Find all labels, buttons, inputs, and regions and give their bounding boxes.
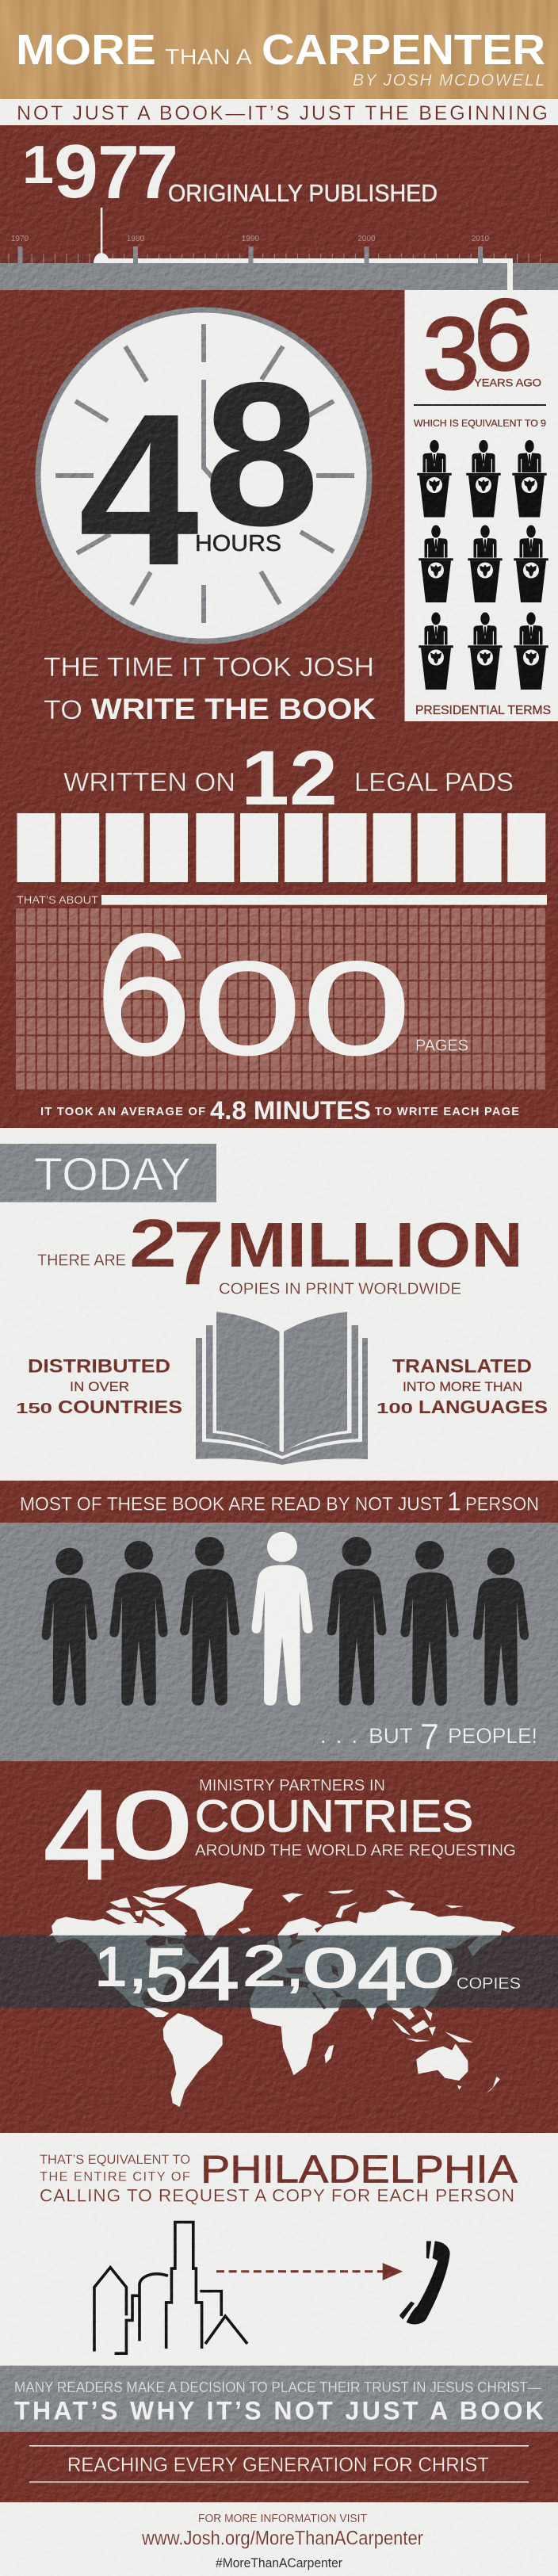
distributed callout: DISTRIBUTED — [28, 1356, 170, 1378]
arrow: city to phone — [216, 2263, 403, 2280]
translated callout: LANGUAGES — [418, 1397, 548, 1417]
icon: seven person figures — [42, 1532, 529, 1706]
translated callout: INTO MORE THAN — [403, 1380, 522, 1394]
caption: time it took josh: TO — [44, 695, 82, 725]
hours label: HOURS — [195, 531, 281, 556]
27 million copies headline: COPIES IN PRINT WORLDWIDE — [219, 1281, 461, 1298]
ministry partners text: AROUND THE WORLD ARE REQUESTING — [195, 1841, 516, 1859]
many readers text: MANY READERS MAKE A DECISION TO PLACE THEIR TRUST IN JESUS CHRIST— — [14, 2379, 541, 2395]
caption: time it took josh — [44, 652, 376, 725]
panel: footer — [0, 2502, 558, 2576]
copies requested number: , — [286, 1936, 304, 1997]
heading: written on 12 legal pads: 12 — [241, 735, 338, 821]
panel: reaching every generation banner — [0, 2432, 558, 2502]
world map — [46, 1882, 515, 2107]
translated callout — [376, 1356, 548, 1417]
byline: BY JOSH MCDOWELL — [353, 71, 545, 90]
big number 600: 0 — [302, 934, 411, 1083]
timeline: 2010 — [472, 235, 490, 243]
copies requested number: 4 — [357, 1932, 407, 2016]
presidential terms label: PRESIDENTIAL TERMS — [415, 704, 551, 717]
27 million copies headline: THERE ARE — [37, 1252, 126, 1270]
ministry partners text — [195, 1777, 516, 1859]
hashtag: #MoreThanACarpenter — [216, 2555, 342, 2570]
but 7 people text: 7 — [420, 1716, 439, 1757]
timeline: 1970 — [11, 235, 29, 243]
minutes per page line: 4.8 MINUTES — [210, 1096, 371, 1125]
philadelphia heading text: CALLING TO REQUEST A COPY FOR EACH PERSON — [40, 2186, 514, 2205]
27 million copies headline — [37, 1203, 523, 1304]
clock tick marks and hands — [55, 324, 354, 623]
number 36: 6 — [474, 278, 533, 391]
panel: seven people — [0, 1523, 558, 1761]
philadelphia heading text — [40, 2149, 518, 2205]
page grid — [16, 908, 547, 1090]
27 million copies headline: MILLION — [227, 1210, 523, 1280]
translated callout: 100 — [376, 1401, 413, 1416]
banner text: 1 — [447, 1487, 461, 1516]
heading: written on 12 legal pads: LEGAL PADS — [354, 767, 514, 797]
timeline — [0, 208, 558, 290]
number 36: 3 — [422, 297, 480, 411]
icon: nine presidential podiums — [417, 440, 548, 690]
minutes per page line: IT TOOK AN AVERAGE OF — [40, 1106, 205, 1118]
big number 40: 4 — [44, 1764, 117, 1905]
year 1977: 7 — [136, 130, 178, 215]
more information label: FOR MORE INFORMATION VISIT — [198, 2512, 367, 2525]
but 7 people text: PEOPLE! — [448, 1724, 537, 1748]
27 million copies headline: 7 — [173, 1203, 224, 1304]
copies requested number: 4 — [187, 1932, 239, 2016]
year 1977: 1 — [22, 135, 54, 195]
panel: subtitle strip — [0, 99, 558, 125]
website url: www.Josh.org/MoreThanACarpenter — [141, 2528, 423, 2550]
translated callout: TRANSLATED — [392, 1356, 532, 1378]
big number 600: 0 — [193, 934, 302, 1083]
subtitle text: NOT JUST A BOOK—IT’S JUST THE BEGINNING — [17, 102, 548, 124]
27 million copies headline: 2 — [129, 1206, 177, 1282]
twelve legal pads — [17, 813, 545, 882]
timeline: 2000 — [357, 235, 376, 243]
icon: telephone handset — [399, 2241, 450, 2324]
copies requested number: 0 — [303, 1937, 358, 1999]
philadelphia heading text: THAT’S EQUIVALENT TO — [40, 2153, 190, 2167]
banner text: REACHING EVERY GENERATION FOR CHRIST — [67, 2454, 489, 2476]
panel: 40 countries section — [0, 1761, 558, 2133]
banner text: MOST OF THESE BOOK ARE READ BY NOT JUST — [20, 1494, 443, 1515]
equivalent to 9 label: WHICH IS EQUIVALENT TO 9 — [414, 419, 546, 429]
timeline: 1990 — [242, 235, 260, 243]
title: More than a Carpenter: MORE — [16, 26, 156, 74]
distributed callout: IN OVER — [70, 1380, 129, 1394]
but 7 people text: . . . — [320, 1724, 357, 1748]
panel: today section — [0, 1128, 558, 1481]
copies requested number: , — [129, 1936, 147, 1997]
philadelphia heading text: THE ENTIRE CITY OF — [40, 2169, 190, 2184]
ministry partners text: MINISTRY PARTNERS IN — [199, 1777, 385, 1794]
minutes per page line: TO WRITE EACH PAGE — [375, 1106, 519, 1118]
caption: time it took josh: THE TIME IT TOOK JOSH — [44, 652, 374, 682]
big number 48: 8 — [204, 339, 319, 568]
copies requested number: 0 — [403, 1937, 454, 1999]
originally published label: ORIGINALLY PUBLISHED — [168, 179, 438, 207]
year 1977: 9 — [54, 129, 98, 214]
clock: 48 hours — [38, 310, 369, 641]
panel: wood title header — [0, 0, 558, 99]
caption: time it took josh: WRITE THE BOOK — [91, 693, 376, 725]
big number 40: 0 — [113, 1772, 192, 1878]
today banner — [0, 1144, 216, 1202]
panel: 1977 history section — [0, 125, 558, 1128]
big number 600: 6 — [95, 899, 192, 1091]
dark band: 1,542,040 copies — [0, 1932, 558, 2017]
years ago label: YEARS AGO — [474, 376, 541, 388]
banner text: PERSON — [465, 1494, 539, 1515]
but 7 people text: BUT — [369, 1724, 413, 1748]
pages label: PAGES — [415, 1038, 468, 1055]
philadelphia heading text: PHILADELPHIA — [201, 2149, 518, 2192]
copies requested number: 1 — [95, 1936, 127, 1997]
ministry partners text: COUNTRIES — [195, 1791, 473, 1842]
title: More than a Carpenter: THAN A — [165, 44, 252, 69]
panel: not just a book banner — [0, 2366, 558, 2432]
timeline: 1980 — [127, 235, 145, 243]
icon: open book — [196, 1312, 368, 1465]
that's about label and bar — [17, 893, 547, 906]
copies requested number: 2 — [243, 1935, 286, 1998]
copies requested number: 5 — [145, 1933, 188, 2017]
panel: 36 years ago — [404, 278, 558, 721]
not just a book text: THAT’S WHY IT’S NOT JUST A BOOK — [14, 2397, 544, 2425]
copies label: COPIES — [457, 1974, 521, 1993]
icon: city skyline — [94, 2222, 247, 2353]
today banner: TODAY — [34, 1149, 191, 1201]
year 1977: 7 — [97, 130, 140, 215]
distributed callout — [16, 1356, 182, 1417]
big number 48: 4 — [78, 369, 201, 610]
distributed callout: 150 — [16, 1401, 52, 1416]
distributed callout: COUNTRIES — [58, 1397, 182, 1417]
title: More than a Carpenter: CARPENTER — [262, 26, 545, 74]
panel: philadelphia comparison — [0, 2133, 558, 2366]
that's about label and bar: THAT’S ABOUT — [17, 893, 98, 906]
heading: written on 12 legal pads: WRITTEN ON — [63, 767, 235, 797]
panel: read by one person banner — [0, 1481, 558, 1523]
